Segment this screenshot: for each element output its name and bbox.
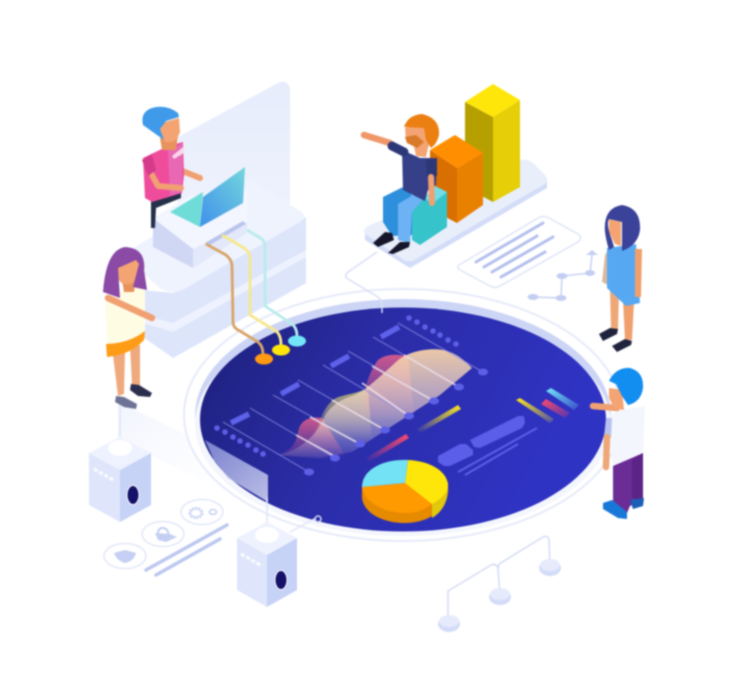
icon: padlock badge <box>142 522 184 546</box>
note card <box>458 216 580 288</box>
highlighted lines over area <box>296 355 459 458</box>
seat cube <box>412 186 447 245</box>
lower arm <box>606 437 607 467</box>
face <box>609 388 624 410</box>
shoes <box>373 232 394 247</box>
node graph <box>528 250 598 301</box>
bottle: left <box>89 405 151 522</box>
person: blue hair at laptop <box>142 107 200 228</box>
dress top <box>105 286 145 345</box>
skirt <box>106 331 145 357</box>
icon: shield badge <box>104 544 146 568</box>
neck and face <box>609 219 621 246</box>
far leg and shoe <box>130 345 140 385</box>
row lines <box>223 323 483 472</box>
connector from platform to disc <box>346 252 382 313</box>
hair <box>609 368 643 405</box>
network nodes with wires <box>438 536 561 632</box>
back arm <box>602 250 608 285</box>
shoes <box>603 500 627 519</box>
person: blue hair man at disc <box>593 368 645 519</box>
dashboard disc <box>200 308 606 532</box>
icon: gears badge <box>181 500 223 524</box>
pointing arm <box>364 135 390 143</box>
torso <box>143 142 184 202</box>
bar chart: yellow bar <box>465 84 520 202</box>
near leg and shoe <box>113 352 125 396</box>
pie chart <box>362 460 448 523</box>
desk base <box>130 181 306 358</box>
hair <box>142 107 179 140</box>
arm <box>108 298 152 318</box>
legs <box>151 193 181 228</box>
row end markers <box>304 368 488 476</box>
bar chart: orange bar <box>430 135 483 223</box>
coloured cables <box>206 230 297 354</box>
legs <box>613 453 643 513</box>
small desk block with keyboard <box>153 190 247 268</box>
shirt <box>606 406 645 465</box>
neck and head <box>414 146 428 157</box>
cable terminals <box>255 336 306 364</box>
glass panel on disc edge <box>205 440 268 502</box>
area chart <box>277 349 472 460</box>
info pills and text lines <box>438 416 537 475</box>
laptop <box>170 167 245 227</box>
axis labels <box>231 327 399 423</box>
rings around dashboard disc <box>184 289 622 541</box>
person: seated man with beard <box>364 114 447 254</box>
side arm <box>431 177 432 203</box>
legs <box>610 290 619 330</box>
dashboard chart: axes, area and labels <box>214 315 488 476</box>
hair <box>103 247 147 298</box>
person: purple hair woman <box>103 247 152 409</box>
bar chart platform <box>364 160 547 268</box>
near leg <box>398 192 430 243</box>
pointing arm <box>593 406 617 408</box>
back board <box>178 82 290 215</box>
dress <box>607 244 640 306</box>
neck and head <box>122 276 136 292</box>
hair <box>404 114 439 148</box>
text lines beside badges <box>146 525 227 575</box>
shoes <box>599 328 618 341</box>
hair <box>605 205 640 251</box>
arm <box>635 249 642 297</box>
glow panel behind left bottle <box>118 402 268 512</box>
far leg <box>383 187 412 236</box>
beard <box>405 135 424 148</box>
forearm <box>152 175 181 188</box>
person: navy hair woman <box>599 205 642 352</box>
neck and head <box>160 135 178 150</box>
torso <box>402 150 437 201</box>
arm to laptop <box>180 170 200 178</box>
bottle: right <box>237 498 321 607</box>
dotted rows <box>214 315 459 457</box>
coloured legend bars <box>366 388 579 462</box>
